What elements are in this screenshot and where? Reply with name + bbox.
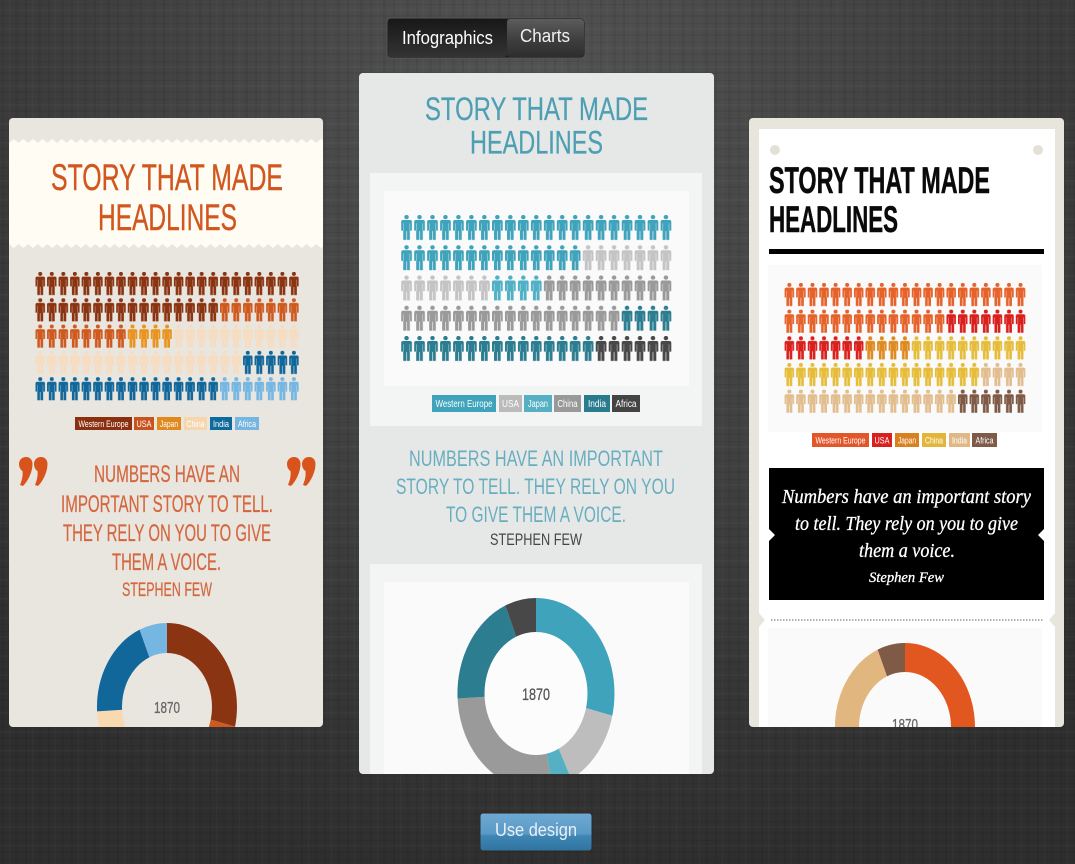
legend: USA [502, 399, 519, 410]
legend: Western Europe [816, 436, 866, 446]
legend: China [925, 436, 943, 446]
heading: HEADLINES [470, 124, 603, 160]
legend: India [952, 436, 967, 446]
legend: Japan [528, 399, 548, 410]
quote: STORY TO TELL. THEY RELY ON YOU [396, 474, 675, 499]
quote box: Stephen Few [869, 570, 944, 586]
tab: Infographics [388, 19, 507, 57]
legend [812, 433, 997, 447]
quote: THEM A VOICE. [112, 549, 221, 576]
legend: China [558, 399, 578, 410]
legend: India [213, 419, 229, 429]
quote box: to tell. They rely on you to give [795, 513, 1018, 535]
quote: IMPORTANT STORY TO TELL. [61, 491, 273, 518]
quote: NUMBERS HAVE AN [94, 461, 240, 488]
donut card [834, 643, 975, 727]
quote: THEY RELY ON YOU TO GIVE [63, 520, 271, 547]
legend: India [588, 399, 606, 410]
donut chart [835, 643, 975, 727]
cream title banner [9, 138, 323, 249]
legend: Africa [616, 399, 637, 410]
heading: STORY THAT MADE [425, 91, 648, 127]
heading: STORY THAT MADE [51, 157, 283, 198]
tab: Infographics: Infographics [402, 28, 493, 48]
quote: TO GIVE THEM A VOICE. [446, 502, 626, 527]
legend: Africa [976, 436, 994, 446]
pictogram chart [34, 270, 305, 402]
quote box: them a voice. [859, 540, 955, 562]
tab: Charts [507, 19, 584, 57]
donut chart [96, 623, 237, 727]
legend: Western Europe [78, 419, 128, 429]
panel: right design (black and white) [749, 118, 1064, 727]
donut chart [457, 598, 614, 789]
heading [52, 164, 282, 230]
quote box [769, 468, 1044, 600]
heading [426, 97, 648, 154]
quote [396, 446, 675, 549]
legend: China [186, 419, 204, 429]
heading [770, 166, 990, 232]
legend: Japan [898, 436, 916, 446]
quote [61, 461, 273, 601]
legend: USA [136, 419, 152, 429]
quote: STEPHEN FEW [490, 530, 582, 549]
button: Use design: Use design [495, 820, 577, 840]
tab switcher [387, 18, 585, 58]
panel: centre design (teal) [359, 73, 714, 789]
pictogram chart [783, 282, 1030, 415]
chart card [784, 283, 1026, 413]
heading: HEADLINES [98, 197, 237, 238]
legend: USA [874, 436, 890, 446]
icon: pin holes [770, 145, 1043, 155]
donut label: 1870 [154, 700, 180, 717]
quote: NUMBERS HAVE AN IMPORTANT [409, 446, 663, 471]
legend [432, 395, 640, 412]
donut label: 1870 [522, 685, 550, 704]
icon: left quote mark [19, 457, 48, 486]
legend: Western Europe [436, 399, 493, 410]
button: Use design [480, 813, 592, 851]
pictogram chart [400, 213, 675, 364]
quote: STEPHEN FEW [122, 580, 212, 601]
legend: Africa [238, 419, 256, 429]
icon: right quote mark [287, 457, 316, 486]
chart card [370, 173, 702, 426]
donut label: 1870 [892, 717, 918, 734]
quote box: Numbers have an important story [781, 486, 1031, 508]
panel: left design (warm) [9, 118, 323, 791]
tab: Charts: Charts [520, 26, 570, 46]
donut card [370, 564, 702, 789]
legend: Japan [160, 419, 178, 429]
legend [75, 417, 259, 430]
heading: HEADLINES [769, 199, 898, 240]
